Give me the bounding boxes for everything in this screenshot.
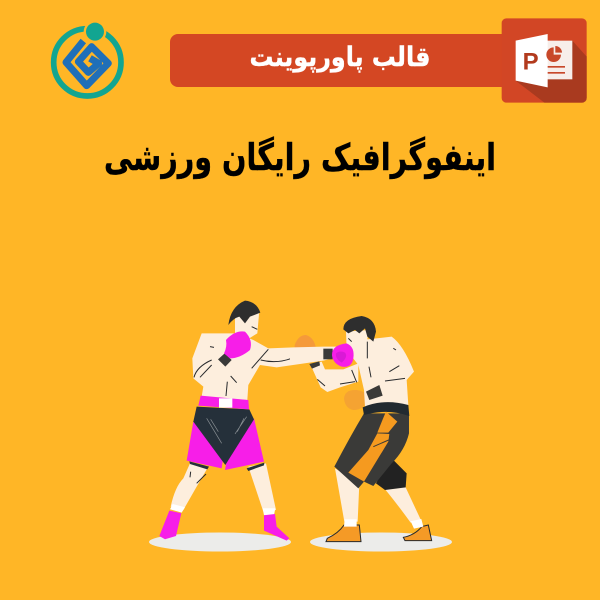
socks <box>170 504 275 515</box>
muscle lines <box>317 338 405 386</box>
muscle lines <box>194 327 292 396</box>
left boxer forearm, wristband and glove over right boxer face <box>290 343 354 367</box>
banner label: قالب پاورپوینت <box>250 42 430 73</box>
right boxer <box>295 316 432 542</box>
shoes <box>326 525 361 542</box>
shorts <box>334 413 409 488</box>
belt buckle <box>219 398 232 408</box>
left boxer <box>159 301 353 541</box>
wrist band <box>218 353 232 367</box>
trunk lines <box>207 417 247 443</box>
wrist bands <box>309 361 383 400</box>
legs <box>171 463 208 510</box>
legs <box>335 468 359 522</box>
hair <box>343 316 376 342</box>
stripe line <box>373 440 389 447</box>
logo <box>54 20 121 96</box>
shorts stripe <box>348 412 397 482</box>
pink trunks sides <box>187 418 264 470</box>
torso and arm <box>192 333 353 400</box>
shorts hem <box>189 461 264 471</box>
glove <box>224 331 251 358</box>
waistband <box>363 402 409 416</box>
belt <box>198 396 249 409</box>
icon: powerpoint: P <box>523 48 539 75</box>
back glove <box>344 390 367 410</box>
knee lines <box>190 472 206 483</box>
front glove <box>295 335 316 353</box>
boots <box>159 511 289 541</box>
hair <box>228 301 260 325</box>
shadow: right boxer <box>310 532 452 552</box>
socks <box>344 519 423 529</box>
arm <box>311 362 358 392</box>
banner bar <box>170 34 510 87</box>
head <box>235 311 259 340</box>
back shorts leg <box>376 457 407 490</box>
torso <box>346 330 414 407</box>
shadow: left boxer <box>149 532 291 552</box>
black trunks centre <box>193 407 254 465</box>
icon: powerpoint <box>502 18 587 103</box>
title: اینفوگرافیک رایگان ورزشی <box>104 136 496 179</box>
